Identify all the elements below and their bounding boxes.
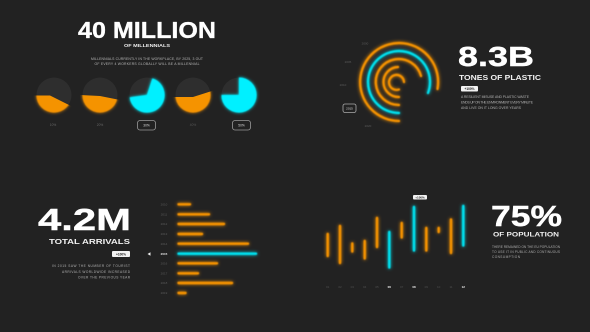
arc chart labels: 2015	[346, 106, 353, 110]
pie labels: 30%	[143, 124, 150, 128]
big number 4.2M: 4.2M	[38, 202, 131, 237]
description: CONSUMPTION	[492, 255, 521, 259]
pie labels: 10%	[50, 123, 56, 127]
month labels: 03	[351, 285, 354, 289]
pie labels	[50, 120, 250, 130]
title: 40 million: 40 MILLION	[78, 17, 216, 43]
month labels: 06	[388, 285, 391, 289]
pie labels: 40%	[190, 123, 196, 127]
month labels: 07	[400, 285, 404, 289]
pie chart 3	[130, 78, 165, 113]
tag: +100%	[415, 196, 425, 200]
year labels: 2013	[161, 232, 168, 236]
heading: tones of plastic: TONES OF PLASTIC	[459, 73, 542, 82]
year labels: 2011	[161, 212, 168, 216]
month labels: 08	[412, 285, 416, 289]
tag: +100%	[464, 87, 475, 91]
vertical bar chart	[328, 206, 463, 268]
description: AND LIVE ON IT LONG OVER YEARS	[461, 106, 522, 110]
month labels: 10	[437, 285, 441, 289]
month labels: 05	[375, 285, 379, 289]
month labels: 04	[363, 285, 367, 289]
arc chart labels: 2020	[365, 124, 372, 128]
year labels: 2015	[161, 252, 168, 256]
year labels	[161, 202, 168, 295]
description: OVER THE PREVIOUS YEAR	[78, 276, 131, 280]
month labels: 11	[449, 285, 453, 289]
year labels: 2012	[161, 222, 168, 226]
description: MILLENNIALS CURRENTLY IN THE WORKPLACE, BY 2025, 3 OUT	[91, 57, 203, 61]
pie chart 2	[82, 78, 118, 112]
arc chart labels: 2005	[345, 60, 352, 64]
month labels: 02	[338, 285, 342, 289]
radial arc chart	[360, 43, 438, 121]
selector arrow	[148, 252, 150, 256]
big number 8.3B: 8.3B	[458, 41, 534, 72]
pie chart 4	[176, 78, 210, 112]
description: OF EVERY 4 WORKERS GLOBALLY WILL BE A MILLENNIAL	[94, 62, 200, 66]
month labels	[326, 285, 465, 289]
pie labels: 20%	[97, 123, 103, 127]
pie chart 5	[222, 78, 256, 112]
month labels: 09	[425, 285, 428, 289]
year labels: 2018	[161, 281, 168, 285]
month labels: 01	[326, 285, 330, 289]
pie labels: 50%	[238, 124, 245, 128]
panel: 75% population	[326, 195, 562, 289]
year labels: 2014	[161, 242, 168, 246]
arc chart labels: 2010	[340, 83, 347, 87]
tag	[461, 86, 478, 92]
description: TO USE IT IN PUBLIC AND CONTINUOUS	[492, 250, 560, 254]
tag	[413, 195, 427, 200]
big number 75%: 75%	[491, 201, 562, 233]
tag: +100%	[116, 252, 126, 256]
description: IN 2015 SAW THE NUMBER OF TOURIST	[52, 264, 130, 268]
month labels: 12	[462, 285, 465, 289]
heading: total arrivals: TOTAL ARRIVALS	[49, 237, 130, 246]
arc chart labels	[340, 42, 372, 128]
description: THERE REMAINED ON THE EU POPULATION	[492, 245, 561, 249]
year labels: 2010	[161, 202, 168, 206]
description: ARRIVALS WORLDWIDE INCREASED	[62, 270, 131, 274]
panel: 4.2M arrivals	[38, 202, 256, 295]
description: A RESILIENT MISUSE AND PLASTIC WASTE	[461, 95, 530, 99]
horizontal bar chart	[178, 204, 256, 293]
description: ENDS UP ON THE ENVIRONMENT EVERY MINUTE	[461, 100, 534, 104]
year labels: 2016	[161, 262, 168, 266]
year labels: 2019	[161, 291, 168, 295]
panel: 40 million millennials	[36, 17, 256, 130]
arc chart labels: 2000	[362, 42, 369, 46]
pie chart 1	[36, 78, 72, 112]
panel: 8.3B plastic	[340, 41, 542, 128]
subtitle: OF MILLENNIALS	[124, 43, 171, 49]
tag	[112, 251, 130, 257]
year labels: 2017	[161, 272, 168, 276]
heading: of population: OF POPULATION	[493, 232, 559, 238]
